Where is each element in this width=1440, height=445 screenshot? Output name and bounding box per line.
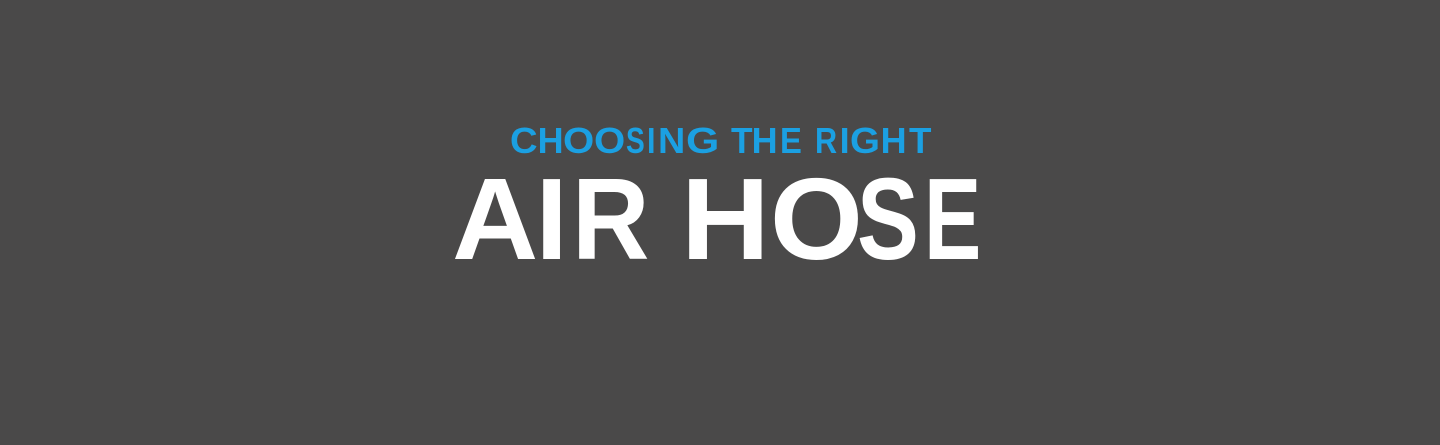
- title: air hose: H: [681, 154, 770, 284]
- subtitle: choosing the right: O: [563, 120, 595, 161]
- title: air hose: S: [857, 154, 919, 284]
- subtitle: choosing the right: N: [658, 120, 685, 161]
- subtitle: choosing the right: H: [881, 120, 907, 161]
- title: air hose: O: [770, 154, 862, 284]
- title: air hose: E: [924, 154, 981, 284]
- title: air hose: A: [452, 154, 538, 284]
- subtitle: choosing the right: T: [909, 120, 931, 161]
- subtitle: choosing the right: [510, 120, 932, 161]
- subtitle: choosing the right: R: [815, 120, 837, 161]
- subtitle: choosing the right: H: [752, 120, 778, 161]
- subtitle: choosing the right: O: [594, 120, 626, 161]
- title: air hose: R: [572, 154, 649, 284]
- subtitle: choosing the right: I: [647, 120, 656, 161]
- subtitle: choosing the right: S: [626, 120, 645, 161]
- subtitle: choosing the right: G: [686, 120, 719, 161]
- subtitle: choosing the right: H: [538, 120, 564, 161]
- title: air hose: I: [536, 154, 568, 284]
- subtitle: choosing the right: C: [510, 120, 538, 161]
- title: air hose: [452, 154, 981, 284]
- subtitle: choosing the right: I: [840, 120, 850, 161]
- subtitle: choosing the right: E: [780, 120, 802, 161]
- subtitle: choosing the right: G: [850, 120, 880, 161]
- subtitle: choosing the right: T: [731, 120, 753, 161]
